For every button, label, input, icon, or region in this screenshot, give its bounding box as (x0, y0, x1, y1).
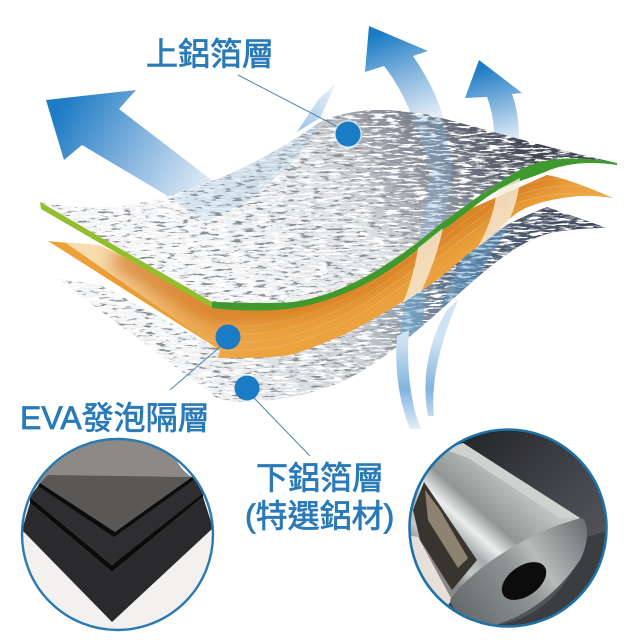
label: upper aluminium foil: 上鋁箔層 (146, 36, 274, 72)
label: EVA foam: EVA發泡隔層 (20, 400, 210, 436)
arrow: upper left heat reflection (46, 90, 213, 198)
label: EVA foam (20, 324, 240, 436)
green edge of upper layer (40, 159, 617, 311)
translucent heat bands crossing the orange layer (403, 178, 520, 303)
upper aluminium foil layer (42, 110, 616, 303)
arrow streak behind top layer (297, 83, 336, 132)
heat bands below the lower layer (396, 300, 458, 429)
orange EVA foam layer (48, 175, 613, 358)
label: lower aluminium foil: 下鋁箔層 (256, 460, 384, 496)
lower aluminium foil layer (58, 207, 607, 402)
label: upper aluminium foil (146, 36, 362, 148)
photo: EVA foam sheets (20, 436, 216, 633)
arrow: middle upward heat reflection (365, 26, 444, 120)
photo: aluminium foil roll (405, 425, 611, 640)
label: lower aluminium foil: (特選鋁材) (245, 498, 394, 534)
label: lower aluminium foil (234, 376, 394, 534)
arrow: right upward heat reflection (465, 60, 522, 138)
